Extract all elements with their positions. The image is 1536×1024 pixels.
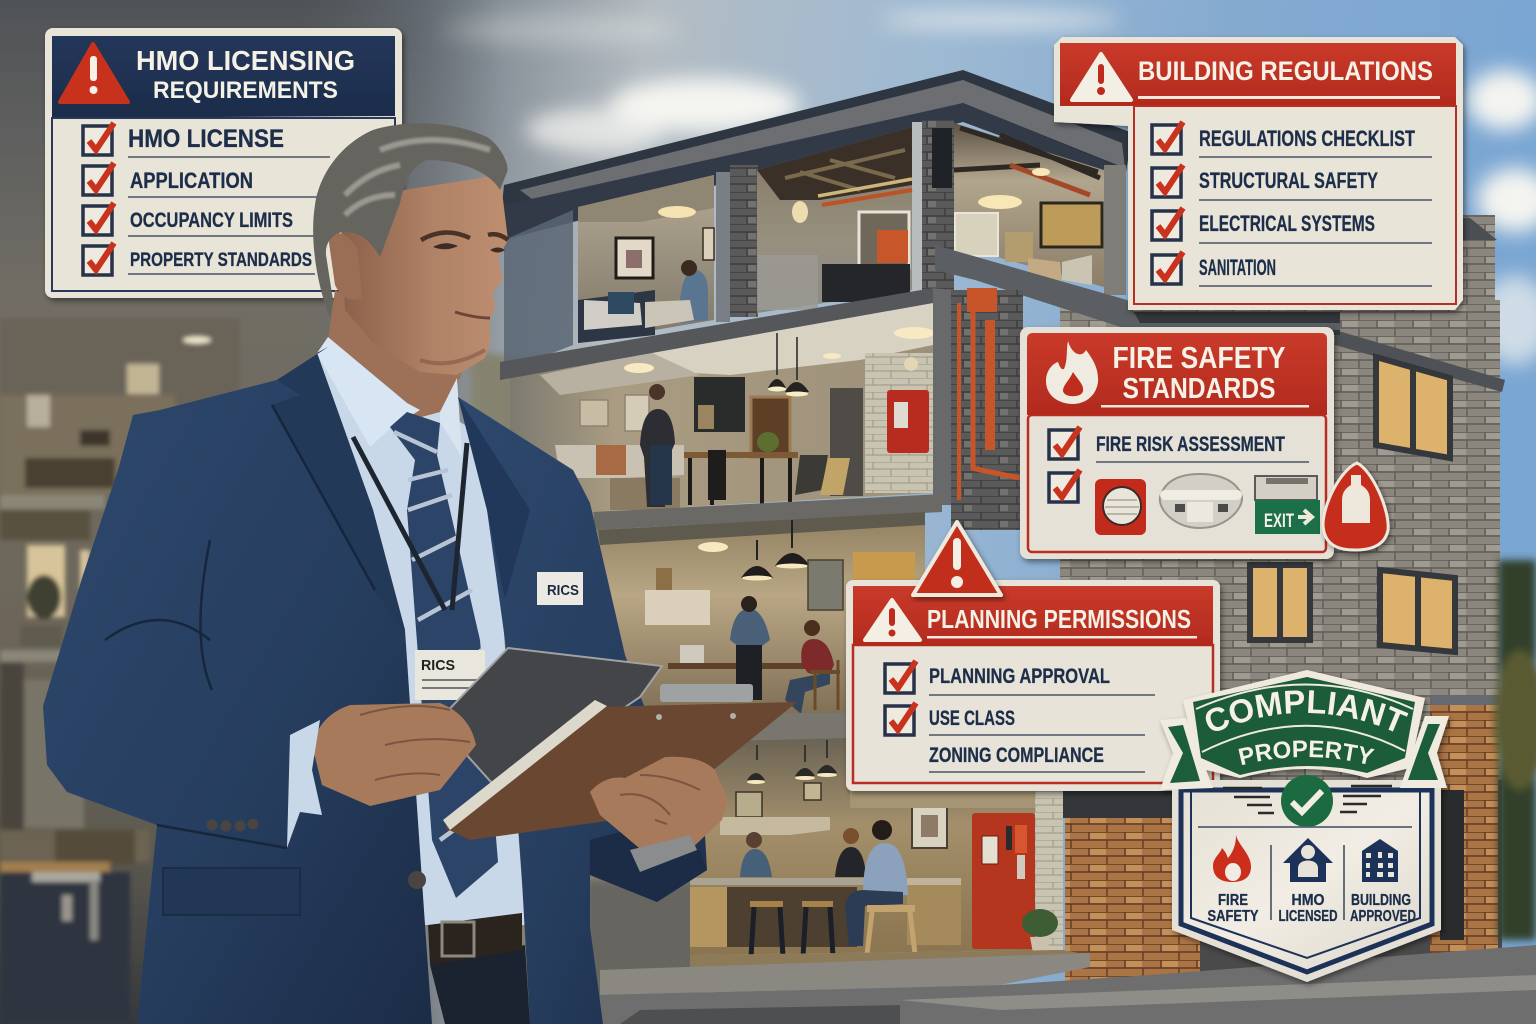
checklist: REGULATIONS CHECKLIST <box>1199 126 1415 151</box>
icon: flame <box>1046 341 1098 404</box>
RICS pin <box>537 572 583 605</box>
checklist: FIRE RISK ASSESSMENT <box>1096 433 1285 456</box>
checklist: USE CLASS <box>929 707 1015 730</box>
icon: green check <box>1281 775 1333 827</box>
clipboard <box>443 700 797 840</box>
blurred interior background on the left <box>0 0 480 1024</box>
checklist <box>83 123 330 275</box>
slab under top right room <box>935 245 1340 330</box>
belt <box>428 913 522 965</box>
head <box>313 123 508 375</box>
RICS pin: RICS <box>547 582 579 599</box>
ID badge: RICS <box>421 657 455 674</box>
room: third floor <box>598 512 925 720</box>
checklist: SANITATION <box>1199 255 1276 280</box>
right sleeve cuff <box>590 830 707 902</box>
icon: exit sign: EXIT <box>1264 511 1294 532</box>
right hand <box>590 757 728 853</box>
panel: HMO licensing requirements <box>45 28 402 298</box>
HMO licensed label: HMO <box>1292 892 1324 909</box>
tie <box>390 412 498 898</box>
panel: fire safety standards <box>1020 327 1334 559</box>
floor slab four <box>700 713 846 742</box>
checklist <box>1049 427 1309 502</box>
banner text: PROPERTY <box>1238 740 1375 766</box>
room: second floor <box>510 303 934 512</box>
room: ground floor <box>690 738 1063 957</box>
inspector figure <box>43 123 797 1024</box>
icon: warning triangle <box>1072 54 1131 100</box>
heading: PLANNING PERMISSIONS <box>927 604 1191 634</box>
papers on clipboard <box>660 684 753 702</box>
panel header <box>52 36 395 118</box>
hair <box>313 123 508 318</box>
checklist: PLANNING APPROVAL <box>929 665 1110 688</box>
room: top right <box>954 123 1104 287</box>
floor <box>690 950 1090 970</box>
icon: exit sign <box>1255 476 1320 534</box>
heading: REQUIREMENTS <box>153 77 338 104</box>
building: brick columns <box>716 120 1126 322</box>
street <box>590 945 1536 1024</box>
floor slab three <box>594 494 942 530</box>
trousers <box>430 945 530 1024</box>
panel: building regulations <box>1054 37 1463 310</box>
fire safety label: SAFETY <box>1208 908 1259 925</box>
left hand <box>312 703 476 806</box>
checklist: PROPERTY STANDARDS <box>130 250 312 271</box>
warning triangle above planning panel <box>913 522 1001 595</box>
ribbon banner <box>1183 670 1425 778</box>
checklist: APPLICATION <box>130 168 253 193</box>
ear <box>328 233 362 300</box>
ground slab <box>600 953 1090 995</box>
checklist: HMO LICENSE <box>128 125 284 153</box>
jacket <box>43 347 707 1024</box>
badge: compliant property <box>1160 670 1454 988</box>
tree <box>1494 560 1536 940</box>
watch <box>630 835 697 872</box>
icon: warning triangle <box>865 600 920 640</box>
icon: fire extinguisher shield <box>1323 463 1388 550</box>
checklist <box>885 661 1155 772</box>
building: roof <box>500 70 1130 372</box>
building approved label <box>1350 892 1416 925</box>
badge shield <box>1172 780 1441 982</box>
icon: HMO house <box>1283 838 1333 882</box>
icon: smoke detector <box>1160 474 1242 528</box>
ID badge <box>415 650 485 700</box>
room: top middle <box>757 127 912 313</box>
icon: building <box>1362 839 1398 882</box>
building approved label: APPROVED <box>1350 908 1416 925</box>
plant <box>1022 909 1058 953</box>
heading: BUILDING REGULATIONS <box>1138 56 1433 86</box>
room: top left <box>578 175 714 343</box>
banner text <box>1206 690 1408 766</box>
lanyard <box>353 437 467 610</box>
panel header <box>1027 333 1327 415</box>
checklist: ZONING COMPLIANCE <box>929 744 1104 767</box>
building: side wall backing <box>1060 300 1502 1000</box>
HMO licensed label: LICENSED <box>1278 908 1338 925</box>
shirt cuff <box>287 720 322 848</box>
checklist: STRUCTURAL SAFETY <box>1199 168 1378 193</box>
clouds <box>440 11 1536 365</box>
red door cabinet <box>972 813 1035 949</box>
slab below top floor <box>500 288 933 380</box>
fire safety label <box>1208 892 1259 925</box>
panel header <box>853 586 1213 646</box>
heading <box>1112 340 1286 405</box>
faded backdrop behind the floors <box>470 350 700 1024</box>
building approved label: BUILDING <box>1351 892 1411 909</box>
ribbon tails <box>1160 716 1449 790</box>
heading: HMO LICENSING <box>136 45 355 76</box>
checklist <box>1152 122 1432 286</box>
panel: planning permissions <box>846 580 1220 791</box>
floor column <box>933 288 1023 530</box>
shirt <box>317 353 525 925</box>
shirt collar <box>317 337 462 457</box>
checklist: OCCUPANCY LIMITS <box>130 209 293 232</box>
icon: fire safety <box>1213 835 1251 882</box>
neck <box>328 290 470 425</box>
tablet <box>437 648 662 792</box>
heading <box>136 45 355 104</box>
checklist: ELECTRICAL SYSTEMS <box>1199 211 1375 236</box>
heading: FIRE SAFETY <box>1112 340 1286 375</box>
building <box>500 70 1536 1024</box>
banner text: COMPLIANT <box>1206 690 1408 732</box>
fire safety label: FIRE <box>1218 892 1248 909</box>
heading: STANDARDS <box>1122 373 1276 405</box>
icon: fire alarm <box>1095 479 1146 535</box>
orange pipes <box>959 288 1020 500</box>
HMO licensed label <box>1278 892 1338 925</box>
panel header <box>1060 43 1456 106</box>
icon: warning triangle <box>60 44 128 102</box>
building: right wing <box>1130 215 1505 965</box>
building: windows <box>1250 357 1455 652</box>
